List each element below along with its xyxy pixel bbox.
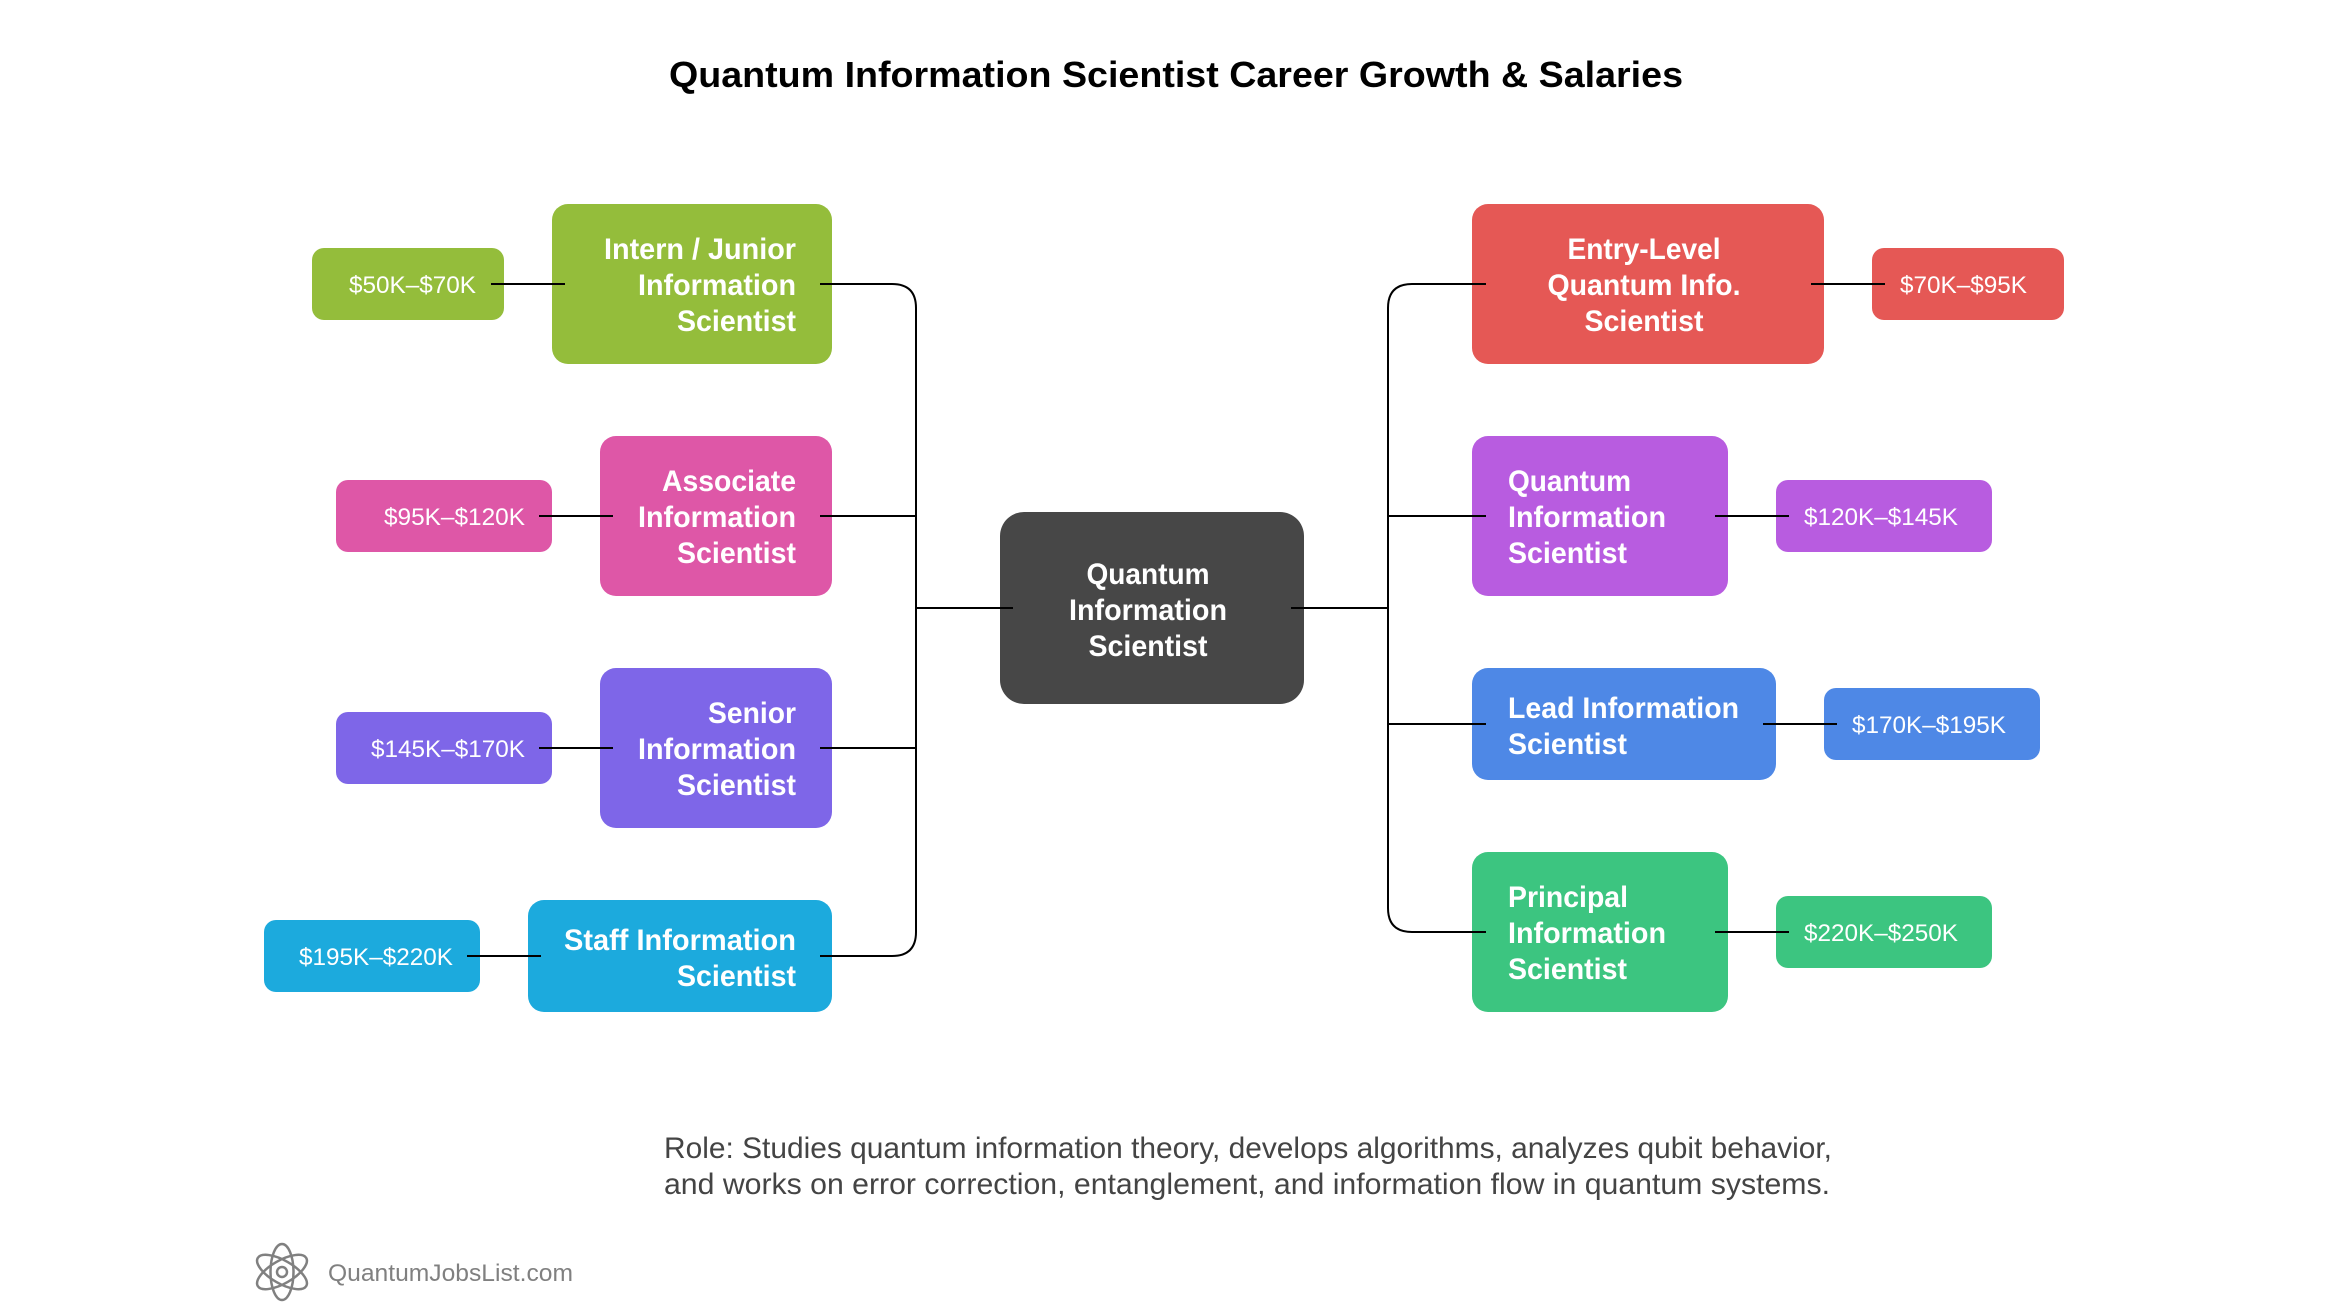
node: Intern / Junior Information Scientist: Intern / Junior xyxy=(604,233,796,266)
node: Quantum Information Scientist: Scientist xyxy=(1508,537,1627,570)
node: Lead Information Scientist xyxy=(1472,668,1776,780)
node: Senior Information Scientist: Scientist xyxy=(677,769,796,802)
node: central role xyxy=(1000,512,1304,704)
node: central role: Scientist xyxy=(1088,630,1208,663)
node: Principal Information Scientist: Principal xyxy=(1508,881,1628,914)
node: Entry-Level Quantum Info. Scientist xyxy=(1472,204,1824,364)
node: Associate Information Scientist xyxy=(600,436,832,596)
salary: $95K–$120K xyxy=(336,480,552,552)
salary: $120K–$145K xyxy=(1776,480,1992,552)
salary: $220K–$250K: $220K–$250K xyxy=(1804,920,1959,947)
node: Quantum Information Scientist: Quantum xyxy=(1508,465,1631,498)
connectors: right branches xyxy=(1291,284,1885,932)
node: Quantum Information Scientist xyxy=(1472,436,1728,596)
node: Lead Information Scientist: Scientist xyxy=(1508,728,1627,761)
salary: $70K–$95K: $70K–$95K xyxy=(1900,272,2028,299)
salary: $50K–$70K: $50K–$70K xyxy=(349,272,477,299)
node: central role: Information xyxy=(1069,594,1227,627)
salary: $70K–$95K xyxy=(1872,248,2064,320)
salary: $95K–$120K: $95K–$120K xyxy=(384,504,526,531)
salary: $145K–$170K: $145K–$170K xyxy=(371,736,526,763)
salary: $195K–$220K xyxy=(264,920,480,992)
node: Quantum Information Scientist: Information xyxy=(1508,501,1666,534)
node: Intern / Junior Information Scientist: Scientist xyxy=(677,305,796,338)
node: Lead Information Scientist: Lead Information xyxy=(1508,692,1739,725)
icon: atom logo xyxy=(252,1244,312,1300)
role description: Role: Studies quantum information theory, develops algorithms, analyzes qubit behavior, xyxy=(664,1132,1832,1165)
node: Staff Information Scientist: Scientist xyxy=(677,960,796,993)
salary: $120K–$145K: $120K–$145K xyxy=(1804,504,1959,531)
node: Entry-Level Quantum Info. Scientist: Scientist xyxy=(1584,305,1704,338)
node: Entry-Level Quantum Info. Scientist: Quantum Info. xyxy=(1548,269,1740,302)
footer brand text: QuantumJobsList.com xyxy=(328,1260,573,1287)
connectors: left branches xyxy=(467,284,1013,956)
node: Associate Information Scientist: Information xyxy=(638,501,796,534)
salary: $170K–$195K: $170K–$195K xyxy=(1852,712,2007,739)
node: Associate Information Scientist: Scientist xyxy=(677,537,796,570)
role description xyxy=(664,1132,1832,1201)
node: Senior Information Scientist: Information xyxy=(638,733,796,766)
node: Associate Information Scientist: Associate xyxy=(662,465,796,498)
title: Quantum Information Scientist Career Growth & Salaries xyxy=(669,54,1683,95)
node: Principal Information Scientist: Information xyxy=(1508,917,1666,950)
node: Senior Information Scientist: Senior xyxy=(708,697,796,730)
node: Intern / Junior Information Scientist xyxy=(552,204,832,364)
salary: $50K–$70K xyxy=(312,248,504,320)
salary: $220K–$250K xyxy=(1776,896,1992,968)
salary: $145K–$170K xyxy=(336,712,552,784)
node: Staff Information Scientist xyxy=(528,900,832,1012)
node: Intern / Junior Information Scientist: Information xyxy=(638,269,796,302)
node: Principal Information Scientist: Scientist xyxy=(1508,953,1627,986)
role description: and works on error correction, entanglement, and information flow in quantum systems. xyxy=(664,1168,1830,1201)
node: Principal Information Scientist xyxy=(1472,852,1728,1012)
node: Senior Information Scientist xyxy=(600,668,832,828)
node: Staff Information Scientist: Staff Information xyxy=(564,924,796,957)
node: central role: Quantum xyxy=(1086,558,1210,591)
salary: $195K–$220K: $195K–$220K xyxy=(299,944,454,971)
salary: $170K–$195K xyxy=(1824,688,2040,760)
node: Entry-Level Quantum Info. Scientist: Entry-Level xyxy=(1568,233,1720,266)
